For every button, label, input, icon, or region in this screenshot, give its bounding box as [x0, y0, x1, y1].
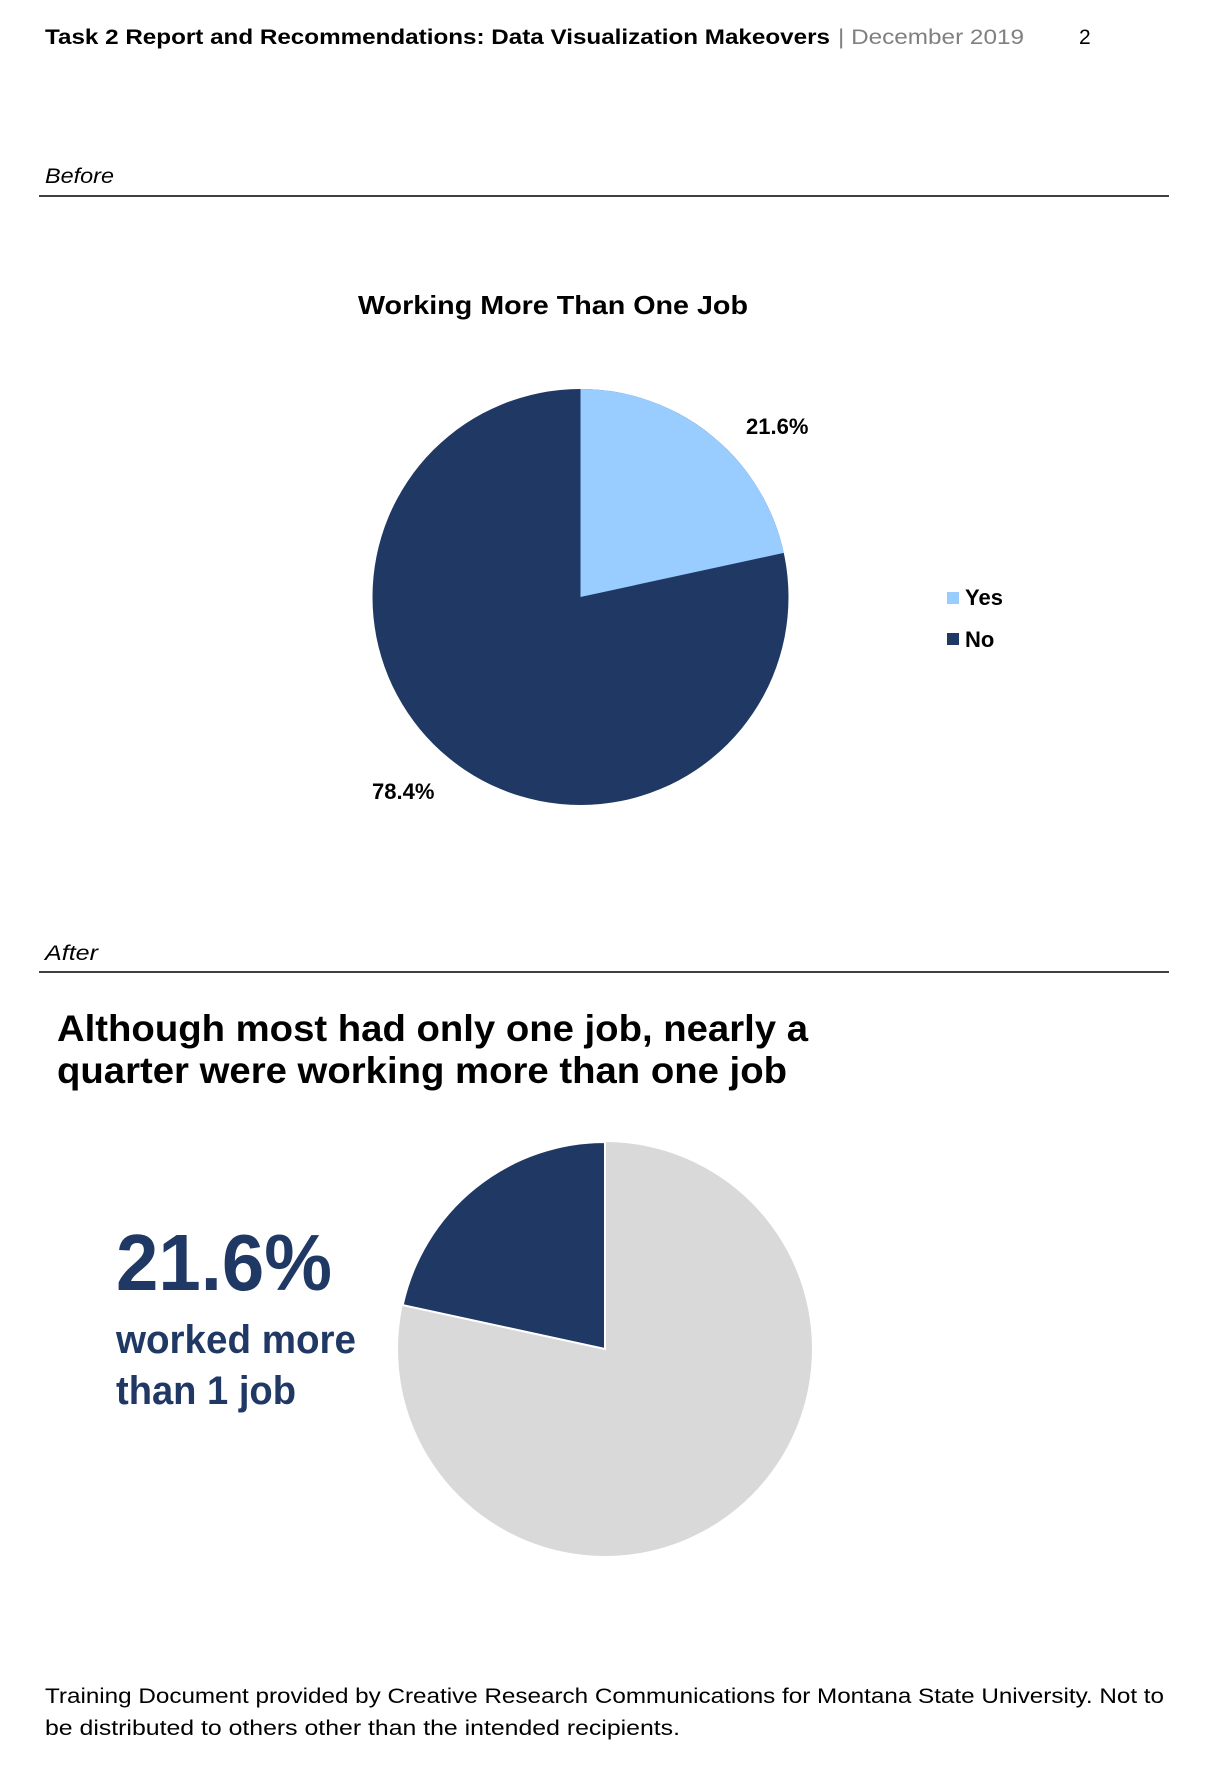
pie label: 21.6%: 21.6%: [746, 414, 808, 439]
legend: No: [965, 627, 994, 652]
after headline: [57, 1008, 808, 1091]
header: [45, 26, 1091, 49]
pie label: 78.4%: 78.4%: [372, 779, 434, 804]
before chart title: Working More Than One Job: [358, 290, 748, 320]
header: Task 2 Report and Recommendations: Data Visualization Makeovers: [45, 26, 830, 49]
header: 2: [1079, 26, 1091, 49]
after headline: Although most had only one job, nearly a: [57, 1008, 808, 1049]
section label: Before: Before: [45, 165, 114, 188]
callout: 21.6% worked more than 1 job: [115, 1218, 356, 1413]
legend: Yes: [965, 585, 1003, 610]
before pie chart: [372, 389, 788, 805]
footer: be distributed to others other than the intended recipients.: [45, 1717, 680, 1740]
callout: 21.6% worked more than 1 job: worked more: [115, 1318, 356, 1362]
header: | December 2019: [838, 26, 1024, 49]
callout: 21.6% worked more than 1 job: 21.6%: [116, 1218, 332, 1307]
legend: [947, 585, 1003, 652]
footer: [45, 1685, 1164, 1740]
callout: 21.6% worked more than 1 job: than 1 job: [116, 1369, 296, 1413]
after pie chart: [398, 1142, 812, 1556]
footer: Training Document provided by Creative Research Communications for Montana State University. Not to: [45, 1685, 1164, 1708]
after headline: quarter were working more than one job: [57, 1050, 787, 1091]
section label: After: After: [43, 942, 99, 965]
